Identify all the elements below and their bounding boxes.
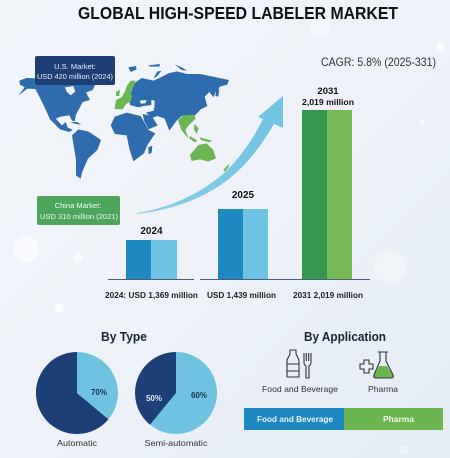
bar: 2024: 2024 — [140, 226, 163, 237]
icon: bottle and fork — [287, 350, 311, 378]
callout: China market: China Market: — [55, 201, 101, 210]
pie chart: Semi-automatic: 50% — [146, 394, 162, 403]
callout: U.S. market — [35, 56, 115, 85]
bar: 2031: 2031 — [317, 86, 339, 97]
stacked bar: application share: Pharma — [383, 414, 414, 424]
bar value labels: 2024: USD 1,369 million — [105, 290, 198, 300]
bar: 2024 — [126, 226, 177, 279]
stacked bar: application share — [244, 408, 443, 430]
bar: 2031 — [302, 86, 354, 279]
title: GLOBAL HIGH-SPEED LABELER MARKET — [78, 3, 398, 23]
world map — [18, 64, 229, 179]
heading: By Type: By Type — [101, 330, 147, 344]
pie chart: Semi-automatic: 60% — [191, 391, 207, 400]
callout: China market: USD 310 million (2021) — [40, 212, 118, 221]
pie chart: Semi-automatic: Semi-automatic — [144, 438, 208, 448]
callout: U.S. market: U.S. Market: — [54, 62, 96, 71]
bar: 2025: 2025 — [232, 190, 255, 201]
label: Pharma: Pharma — [368, 384, 398, 394]
callout: U.S. market: USD 420 million (2024) — [37, 72, 113, 81]
stacked bar: application share: Food and Beverage — [257, 414, 333, 424]
bar value labels: USD 1,439 million — [207, 290, 276, 300]
map: Americas — [18, 78, 101, 179]
bar value labels — [105, 290, 363, 300]
label: Food and Beverage: Food and Beverage — [262, 384, 338, 394]
bar chart — [105, 86, 370, 300]
pie chart: Semi-automatic — [135, 352, 217, 448]
axis line — [108, 278, 370, 280]
pie chart: Automatic: Automatic — [57, 438, 98, 448]
icon: pharma flask and cross — [360, 352, 393, 378]
bar: 2031: 2,019 million — [302, 97, 354, 107]
heading: By Application: By Application — [304, 330, 386, 344]
map: Eurasia, Africa and Pacific — [111, 64, 229, 172]
bar value labels: 2031 2,019 million — [293, 290, 363, 300]
pie chart: Automatic — [36, 352, 118, 448]
CAGR text: CAGR: 5.8% (2025-331) — [321, 55, 436, 69]
arrow: growth trend — [137, 96, 283, 214]
callout: China market — [37, 196, 120, 225]
bar: 2025 — [218, 190, 268, 279]
pie chart: Automatic: 70% — [91, 388, 107, 397]
